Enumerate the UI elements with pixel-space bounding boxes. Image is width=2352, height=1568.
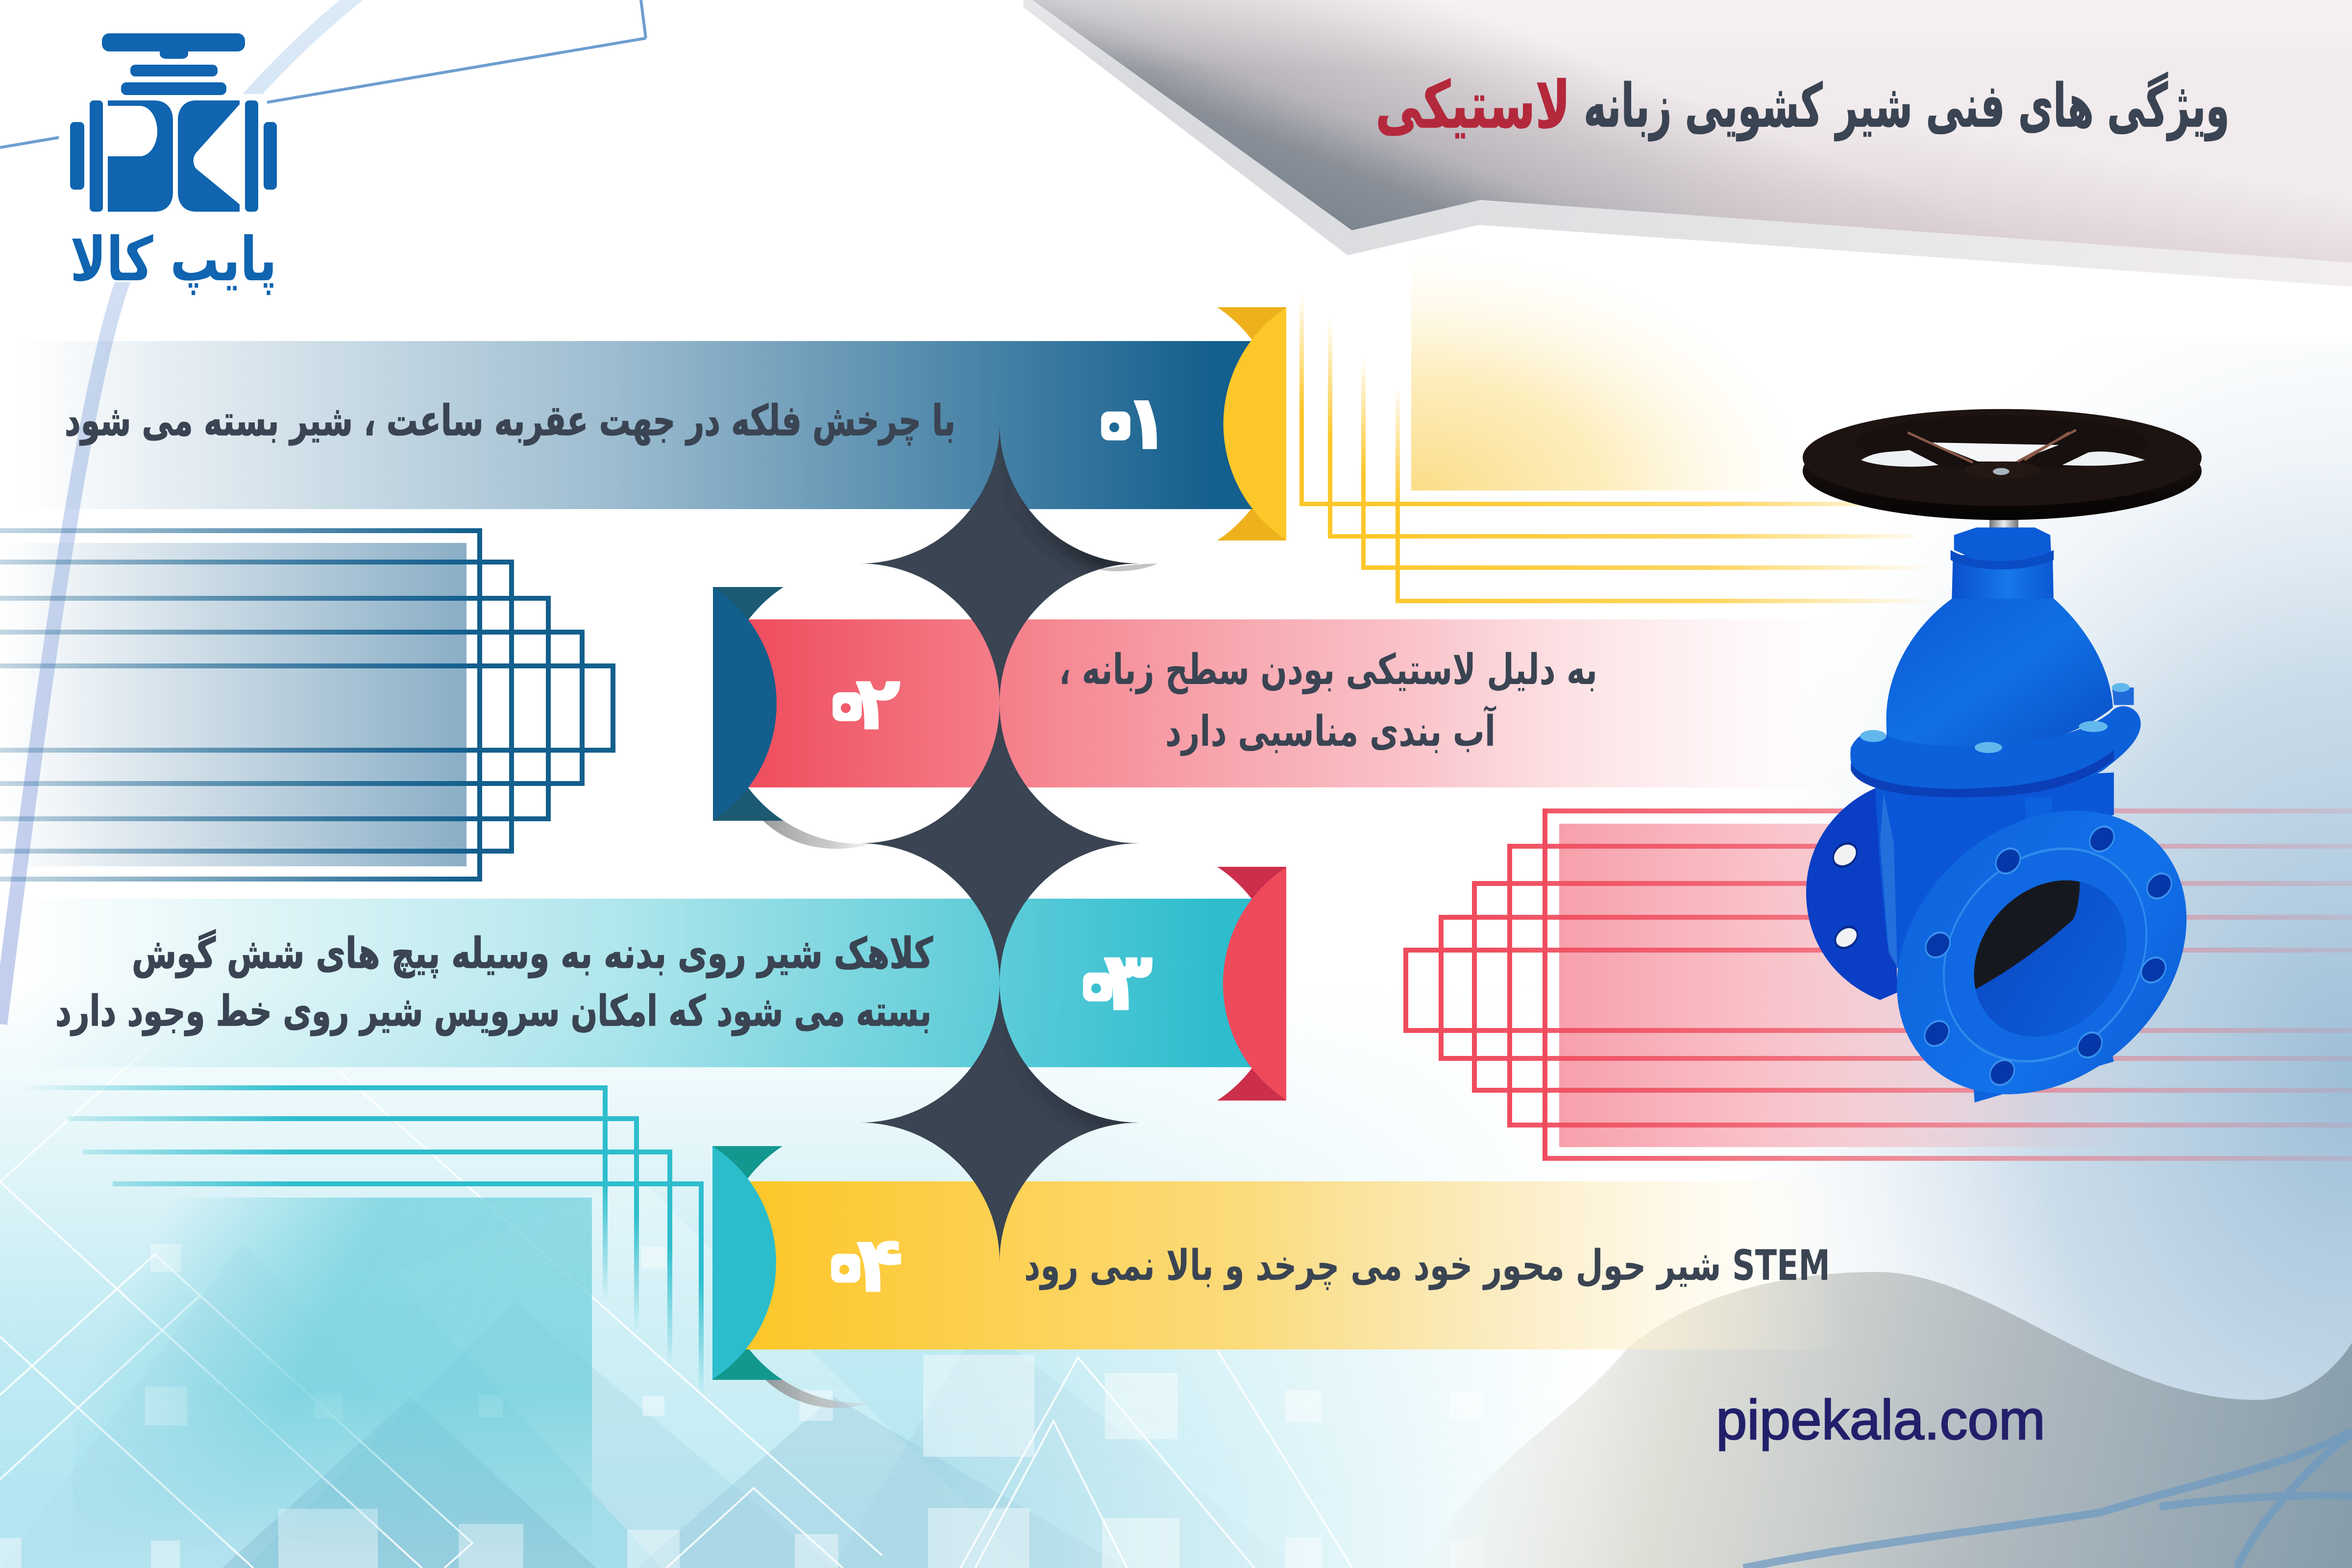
text: step 04: STEM شیر حول محور خود می چرخد و بالا نمی رود	[1024, 1241, 1830, 1290]
valve handwheel	[1803, 409, 2202, 520]
logo wordmark: پایپ کالا	[70, 224, 277, 295]
connector stars	[860, 424, 1157, 1263]
number 01: ۰	[1090, 372, 1141, 469]
number 03	[1072, 933, 1153, 1030]
circle shadow: step 02	[763, 821, 877, 849]
number 02	[822, 653, 901, 750]
logo mark	[70, 33, 277, 212]
header banner	[1024, 0, 2352, 287]
website url: pipekala.com	[1716, 1389, 2045, 1451]
valve stem	[1989, 519, 2018, 537]
decoration: red frames	[1403, 808, 2352, 1161]
step 04 panel	[712, 1146, 1867, 1380]
background: grey wave	[1421, 1272, 2352, 1568]
background: blue curved lines	[1743, 1431, 2352, 1568]
text: step 02: به دلیل لاستیکی بودن سطح زبانه ،	[1059, 645, 1597, 694]
text: step 03: بسته می شود که امکان سرویس شیر روی خط وجود دارد	[55, 987, 931, 1036]
background: pale curved line	[0, 0, 358, 1024]
gate valve illustration	[1803, 409, 2208, 1139]
text: step 02: آب بندی مناسبی دارد	[1165, 706, 1496, 756]
decoration: yellow frames	[1299, 240, 1939, 603]
text: step 03	[55, 929, 933, 1036]
number 04: ۰	[820, 1215, 871, 1312]
star 1	[860, 424, 1157, 704]
step 01 panel	[0, 307, 1286, 540]
number 02: ۰	[822, 653, 873, 750]
decorative line corner	[0, 0, 646, 147]
decoration: teal frames	[23, 1085, 704, 1550]
logo	[70, 33, 277, 295]
number 04: ۴	[857, 1220, 903, 1309]
star 3	[860, 983, 1139, 1263]
text: step 02	[1059, 645, 1597, 756]
valve body	[1875, 773, 2114, 980]
background: bottom-left geometric field	[0, 1028, 1519, 1568]
number 01: ۱	[1124, 379, 1170, 466]
logo backing	[59, 94, 267, 282]
text: step 01: با چرخش فلکه در جهت عقربه ساعت ، شیر بسته می شود	[65, 396, 956, 445]
circle shadow: step 04	[765, 1380, 873, 1408]
number 03: ۳	[1103, 934, 1153, 1029]
title	[1375, 68, 2230, 143]
star 2	[860, 704, 1139, 983]
valve bonnet flange	[1850, 683, 2141, 797]
title: لاستیکی	[1375, 68, 1570, 143]
text: step 03: کلاهک شیر روی بدنه به وسیله پیچ های شش گوش	[132, 929, 933, 978]
valve neck and cap	[1951, 528, 2054, 608]
valve dome	[1886, 598, 2113, 754]
number 01	[1090, 372, 1170, 469]
decoration: blue frames	[0, 528, 615, 882]
background: right blue glow	[1617, 343, 2352, 1568]
step 03 panel	[0, 867, 1286, 1101]
valve rear flange	[1806, 787, 1897, 1000]
number 04	[820, 1215, 903, 1312]
step 02 panel	[713, 587, 1867, 821]
valve front flange	[1875, 766, 2208, 1139]
number 02: ۲	[856, 661, 901, 746]
number 03: ۰	[1072, 933, 1123, 1030]
